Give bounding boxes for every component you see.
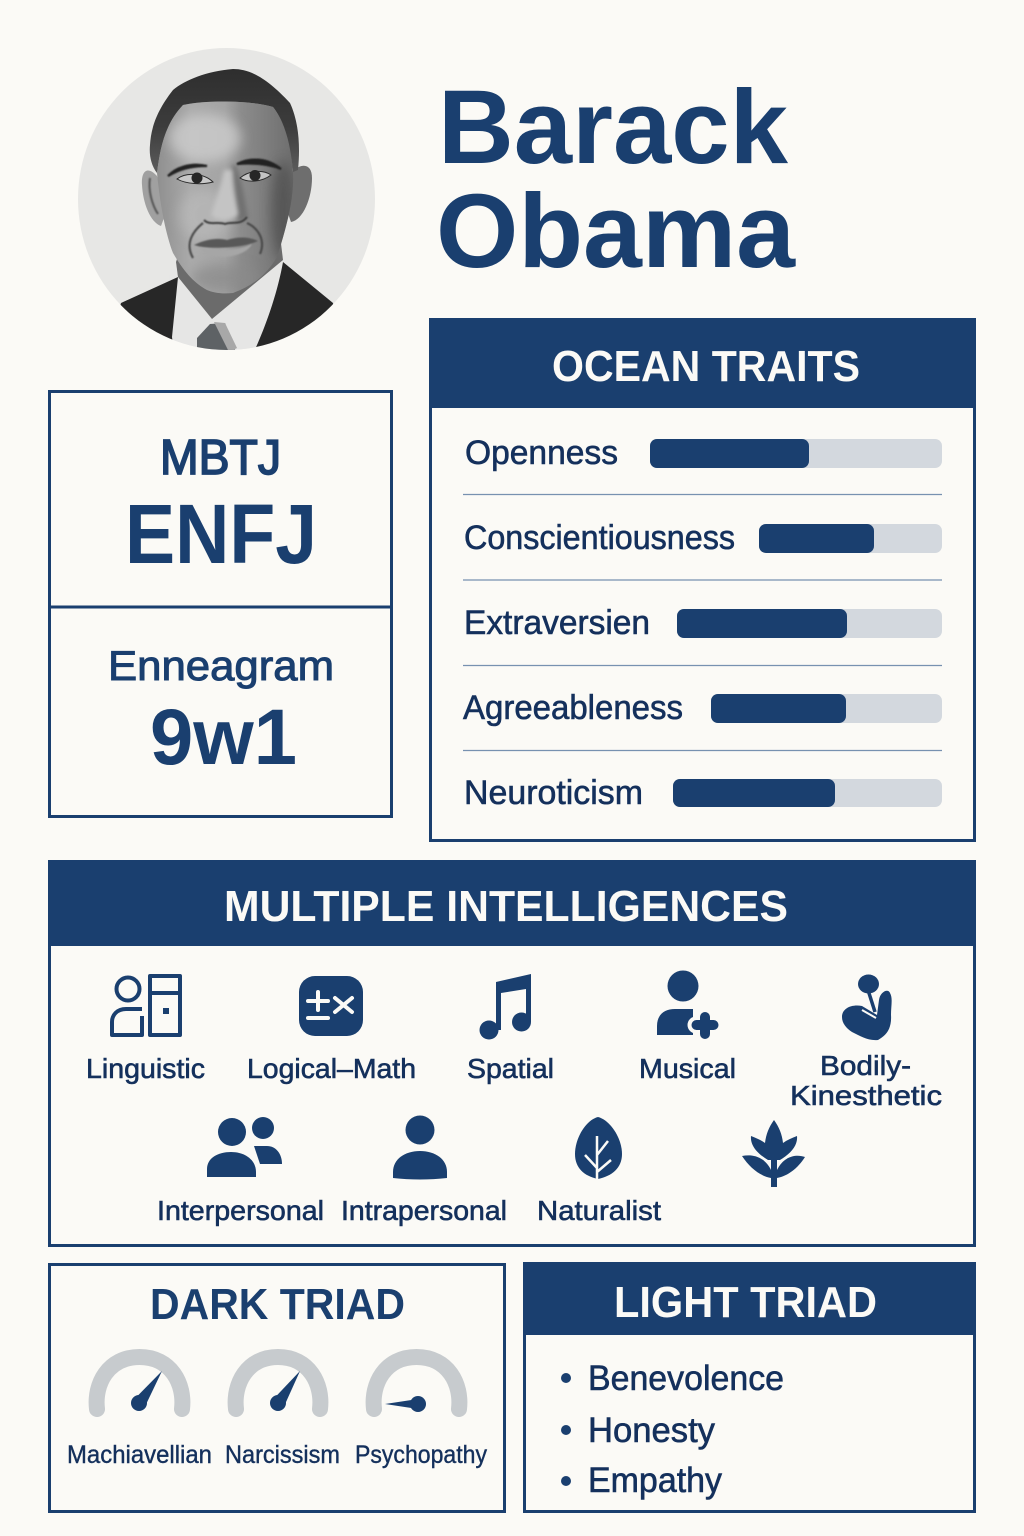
MBTI label: MBTJ [160,431,281,485]
label: Intrapersonal: Intrapersonal [341,1195,507,1226]
icon: leaf [575,1117,622,1179]
icon: Logical-Math [299,976,363,1036]
MBTI value: ENFJ [125,487,317,581]
Enneagram label: Enneagram [108,642,334,689]
title: Barack Obama: Obama [436,173,797,290]
icon: Interpersonal [207,1117,282,1177]
list item: Benevolence: Benevolence [588,1359,784,1398]
label: Logical-Math: Logical–Math [247,1053,416,1084]
label: Naturalist: Naturalist [537,1195,661,1226]
label: Machiavellian: Machiavellian [67,1441,212,1469]
Multiple Intelligences heading: MULTIPLE INTELLIGENCES [224,882,788,931]
icon: music note [480,974,531,1040]
panel: MBTI and Enneagram [49,392,392,816]
label: Bodily-Kinesthetic: Kinesthetic [790,1080,942,1111]
icon: Intrapersonal [393,1116,447,1180]
trait: Conscientiousness: Conscientiousness [464,519,735,557]
trait: Neuroticism [464,774,942,812]
label: Linguistic: Linguistic [86,1053,205,1084]
label: Interpersonal: Interpersonal [157,1195,324,1226]
panel: Multiple Intelligences [48,860,976,1246]
trait: Openness [465,434,942,472]
icon: Linguistic [112,976,180,1035]
icon: plant [742,1120,805,1187]
trait: Agreeableness [463,689,942,727]
panel: Dark Triad [50,1264,504,1512]
label: Musical: Musical [639,1053,736,1084]
label: Bodily-Kinesthetic: Bodily- [820,1050,911,1081]
list item: Honesty: Honesty [588,1411,715,1450]
icon: Bodily-Kinesthetic [842,974,892,1040]
OCEAN heading [429,318,976,408]
title: Barack Obama: Barack [438,69,789,186]
trait: Extraversion: Extraversien [464,604,650,642]
list item: Empathy: Empathy [588,1461,722,1500]
trait: Agreeableness: Agreeableness [463,689,683,727]
label: Narcissism: Narcissism [225,1441,340,1469]
label: Psychopathy: Psychopathy [355,1441,487,1469]
trait: Conscientiousness [464,519,942,557]
Light Triad heading [523,1262,976,1335]
panel: Light Triad [523,1262,976,1512]
OCEAN heading: OCEAN TRAITS [552,342,860,391]
trait: Neuroticism: Neuroticism [464,774,643,812]
label: Spatial: Spatial [467,1053,554,1084]
Multiple Intelligences heading [48,860,976,946]
title: Barack Obama [436,69,797,290]
Light Triad heading: LIGHT TRIAD [614,1278,877,1327]
gauge: Machiavellian [97,1357,182,1411]
trait: Extraversion [464,604,942,642]
Enneagram value: 9w1 [150,692,297,781]
Dark Triad heading: DARK TRIAD [150,1280,405,1329]
panel: OCEAN traits [429,318,976,840]
trait: Openness: Openness [465,434,618,472]
label: Bodily-Kinesthetic [790,1050,942,1111]
portrait photo [78,48,375,350]
icon: person with plus [657,970,714,1035]
gauge: Narcissism [236,1357,320,1411]
gauge: Psychopathy [374,1357,459,1412]
